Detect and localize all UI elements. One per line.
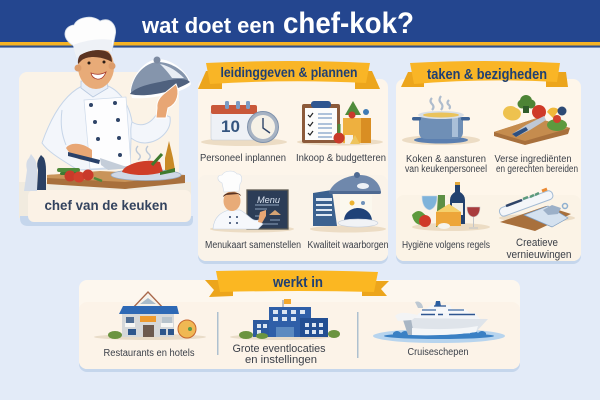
label: Kwaliteit waarborgen: Kwaliteit waarborgen <box>308 240 388 251</box>
name card <box>20 190 193 226</box>
divider <box>217 312 218 355</box>
label: Hygiëne volgens regels: Hygiëne volgens regels <box>402 240 490 251</box>
label: Cruiseschepen: Cruiseschepen <box>408 347 468 358</box>
icon: cruise ship <box>373 301 505 343</box>
label: Creatieve vernieuwingen <box>506 237 572 261</box>
label: Creatieve vernieuwingen: vernieuwingen <box>506 249 572 261</box>
label: Koken & aansturen van keukenpersoneel: van keukenpersoneel <box>405 164 487 175</box>
icon: large event venue building <box>230 299 340 340</box>
icon: menu booklet and covered dish <box>310 172 386 232</box>
label: Grote eventlocaties en instellingen: en instellingen <box>245 354 317 366</box>
panel: leidinggeven & plannen <box>198 61 388 264</box>
label: Grote eventlocaties en instellingen <box>232 343 326 366</box>
panel: werkt in <box>79 270 520 372</box>
label: Personeel inplannen: Personeel inplannen <box>200 153 286 164</box>
icon: wine, cheese and tomato <box>412 182 490 231</box>
title: chef-kok? <box>283 7 414 40</box>
name card: chef van de keuken <box>44 197 168 213</box>
icon: chef with menu board: Menu <box>257 195 280 205</box>
steam <box>136 146 150 160</box>
label: Creatieve vernieuwingen: Creatieve <box>516 237 558 249</box>
ribbon: werkt in: werkt in <box>272 274 323 291</box>
label: Koken & aansturen van keukenpersoneel: Koken & aansturen <box>406 154 486 165</box>
cutting board <box>47 172 185 189</box>
pepper and salt mills <box>24 154 46 191</box>
divider <box>357 312 358 358</box>
chef hat <box>65 17 116 57</box>
label: Grote eventlocaties en instellingen: Grote eventlocaties <box>232 343 326 355</box>
label: Verse ingrediënten en gerechten bereiden: Verse ingrediënten <box>494 154 572 165</box>
ribbon: taken & bezigheden <box>401 61 568 87</box>
icon: cooking pot <box>402 96 480 145</box>
ribbon: werkt in <box>205 270 389 297</box>
oil bottle <box>165 141 175 170</box>
panel: taken & bezigheden <box>396 61 581 264</box>
ribbon: taken & bezigheden: taken & bezigheden <box>427 66 547 83</box>
label: Verse ingrediënten en gerechten bereiden <box>494 154 578 175</box>
hand holding cloche <box>156 84 178 118</box>
label: Menukaart samenstellen: Menukaart samenstellen <box>205 240 301 251</box>
title <box>141 7 414 40</box>
label: Inkoop & budgetteren: Inkoop & budgetteren <box>296 153 386 164</box>
icon: chef with menu board <box>210 171 294 232</box>
illustration: chef with cloche <box>24 17 191 191</box>
label: Restaurants en hotels: Restaurants en hotels <box>104 348 194 359</box>
plate with food <box>111 170 181 180</box>
icon: calendar and clock: 10 <box>221 117 240 136</box>
label: Koken & aansturen van keukenpersoneel <box>405 154 487 175</box>
ribbon: leidinggeven & plannen <box>198 61 380 89</box>
label: Verse ingrediënten en gerechten bereiden: en gerechten bereiden <box>496 164 578 175</box>
hand with knife <box>66 144 92 160</box>
panel: chef van de keuken <box>19 72 193 226</box>
ribbon: leidinggeven & plannen: leidinggeven & plannen <box>220 64 358 80</box>
jacket buttons <box>89 101 122 157</box>
icon: board with thermometer and cloth <box>498 189 575 231</box>
cloche <box>130 59 191 98</box>
icon: calendar and clock <box>201 101 287 146</box>
vegetables <box>57 168 80 172</box>
header banner <box>0 0 600 48</box>
title: wat doet een <box>141 13 275 38</box>
chef jacket <box>42 86 170 170</box>
icon: restaurant and hotel building <box>94 292 206 340</box>
chef head <box>78 45 114 89</box>
icon: cutting board with fresh ingredients <box>494 95 570 145</box>
icon: clipboard and groceries <box>297 101 383 146</box>
